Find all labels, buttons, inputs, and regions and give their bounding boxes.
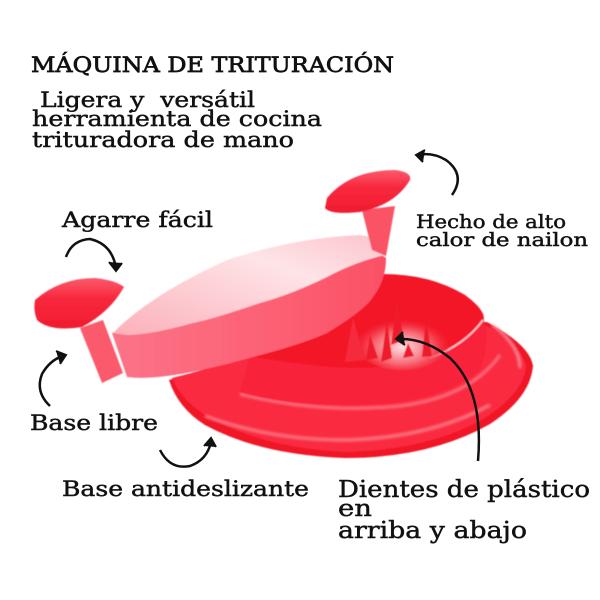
base plate (169, 322, 533, 458)
lower cup (240, 274, 486, 405)
label: plastic teeth: arriba y abajo (338, 518, 527, 544)
label: plastic teeth (338, 477, 590, 544)
teeth (345, 300, 432, 362)
lid rim (112, 240, 386, 378)
arrow: easy grip (66, 239, 122, 271)
lid top (113, 235, 385, 335)
description text (32, 88, 322, 152)
title: MÁQUINA DE TRITURACIÓN (31, 52, 394, 77)
description text: herramienta de cocina (32, 107, 322, 131)
description text: trituradora de mano (32, 128, 294, 152)
arrow: nylon (416, 150, 458, 195)
right handle (325, 170, 410, 256)
label: non-slip base: Base antideslizante (62, 477, 309, 501)
label: nylon: calor de nailon (416, 230, 588, 251)
label: plastic teeth: Dientes de plástico (338, 477, 590, 503)
arrow: teeth (396, 332, 479, 461)
description text: Ligera y versátil (40, 88, 255, 112)
arrow: non-slip base (160, 438, 216, 467)
left handle (34, 278, 124, 383)
product: grinder (34, 170, 533, 458)
label: free base: Base libre (30, 411, 158, 435)
label: nylon (416, 212, 588, 251)
label: plastic teeth: en (338, 496, 372, 522)
arrow: free base (40, 351, 66, 406)
label: easy grip: Agarre fácil (61, 208, 213, 232)
label: nylon: Hecho de alto (416, 212, 566, 233)
